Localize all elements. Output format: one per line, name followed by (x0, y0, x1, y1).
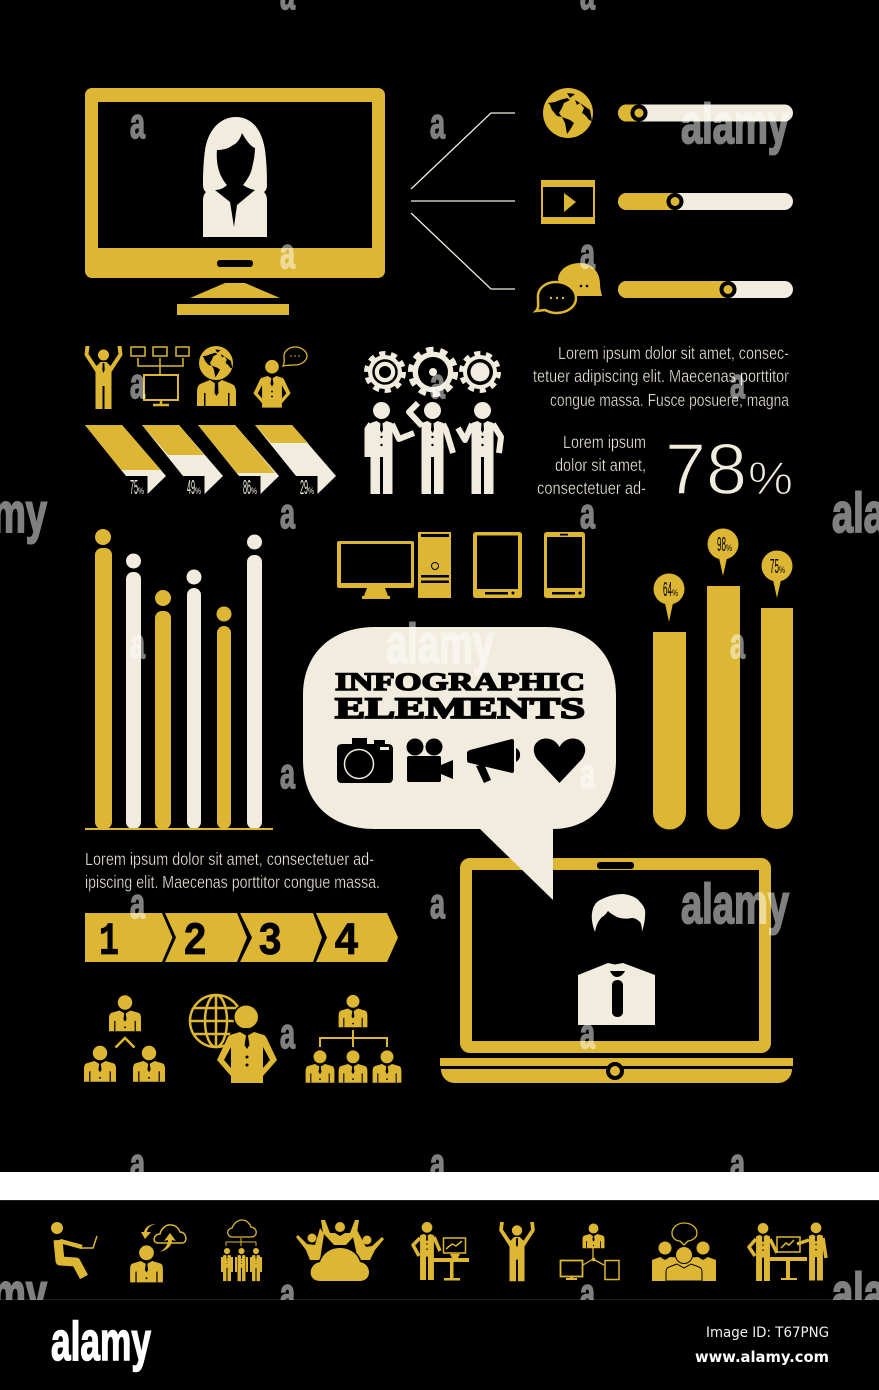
icon: team on cloud (296, 1220, 384, 1281)
bar 4 (186, 570, 202, 829)
icon: presenter at desk (413, 1222, 469, 1280)
stat 78% (665, 430, 793, 510)
step 4 (316, 913, 398, 968)
laptop base (440, 1058, 793, 1083)
icon: tower (418, 532, 451, 598)
chevron 49%: % (195, 486, 201, 496)
chevron 49%: 49 (187, 477, 195, 499)
watermarks: a (430, 360, 446, 408)
woman avatar (203, 117, 267, 237)
watermarks: a (130, 100, 146, 148)
baseline (85, 828, 273, 830)
icon row: business (84, 346, 307, 409)
man pointing (368, 402, 414, 494)
teamwork gears and men (367, 350, 501, 494)
icon: megaphone (467, 739, 520, 783)
text block top right (533, 343, 789, 410)
bar 2 (126, 554, 141, 829)
panel: monitor with woman (85, 88, 385, 315)
icon: two men and chart (749, 1222, 826, 1281)
watermarks: a (730, 360, 746, 408)
device icons (337, 532, 585, 599)
stat 78%: % (748, 452, 793, 504)
watermarks: a (280, 750, 296, 798)
watermarks: a (580, 1010, 596, 1058)
icon: man arms up (499, 1222, 535, 1281)
icon: camera (337, 738, 393, 783)
step 1: 1 (99, 916, 119, 968)
watermarks: a (580, 1270, 596, 1318)
icon: phone (544, 532, 585, 598)
white band (0, 1172, 879, 1200)
bar 1 (95, 529, 112, 829)
globe person icon (190, 995, 277, 1083)
chevron 86%: 86 (243, 477, 251, 499)
watermarks: a (430, 880, 446, 928)
icon: tablet (473, 532, 522, 598)
watermarks: a (130, 620, 146, 668)
tube 98% (707, 528, 740, 830)
band frame (0, 1200, 879, 1300)
text block top right: tetuer adipiscing elit. Maecenas porttitor (533, 366, 789, 386)
watermarks: a (280, 1270, 296, 1318)
watermarks: a (580, 750, 596, 798)
watermarks: a (730, 620, 746, 668)
text block next to 78% (537, 432, 646, 498)
text block top right: Lorem ipsum dolor sit amet, consec- (558, 343, 789, 363)
chevron 29% (255, 425, 336, 499)
footer image id: Image ID: T67PNG (706, 1325, 829, 1341)
watermarks: a (580, 230, 596, 278)
chevron 49% (142, 425, 223, 499)
bar 6 (247, 534, 262, 829)
slider 2 (618, 193, 793, 210)
icon: network of monitors (131, 347, 189, 405)
watermarks: a (730, 1140, 746, 1188)
icon: man with speech bubble (253, 347, 307, 408)
footer url: www.alamy.com (695, 1348, 829, 1366)
watermarks: a (130, 360, 146, 408)
watermarks: a (280, 490, 296, 538)
title (335, 669, 585, 725)
chevron 29%: % (308, 486, 314, 496)
laptop screen (466, 864, 765, 1047)
stat 78%: 78 (665, 430, 747, 510)
icon: cloud team (222, 1220, 261, 1281)
step 3 (240, 913, 322, 968)
man arm raised (409, 402, 453, 494)
step 2: 2 (183, 916, 207, 968)
gear right (462, 354, 498, 390)
tube 98%: % (726, 543, 732, 553)
icon: chat bubbles (536, 263, 602, 313)
tube 75%: 75 (770, 556, 779, 578)
text block left (85, 849, 380, 892)
trackpad ring (608, 1064, 622, 1078)
watermarks: a (430, 1140, 446, 1188)
percent chevrons (85, 425, 336, 499)
chevron 75%: % (138, 486, 144, 496)
icon: heart (534, 739, 585, 783)
camera slot (597, 862, 634, 869)
icon: person and cloud (130, 1224, 186, 1282)
monitor stand (177, 283, 289, 315)
text block left: Lorem ipsum dolor sit amet, consectetuer ad- (85, 849, 374, 869)
watermarks: a (280, 1010, 296, 1058)
watermarks: a (280, 230, 296, 278)
icon: globe man (197, 346, 236, 406)
speech bubble (303, 627, 616, 900)
chevron 86% (198, 425, 279, 499)
icon: globe (543, 88, 593, 138)
slider 1 (618, 104, 793, 122)
step 4: 4 (334, 916, 359, 968)
org chart icon (306, 995, 401, 1083)
connector lines (411, 113, 515, 289)
icon: shared network (560, 1224, 619, 1280)
numbered arrow steps (85, 913, 398, 968)
text block left: ipiscing elit. Maecenas porttitor congue massa. (85, 872, 380, 892)
chevron 75%: 75 (130, 477, 138, 499)
man hand on hip (458, 402, 501, 494)
icon: film camera (406, 738, 453, 782)
watermarks: a (580, 490, 596, 538)
bar 3 (155, 590, 171, 829)
man avatar (578, 894, 655, 1025)
chevron 29%: 29 (300, 477, 308, 499)
watermarks: alamy (681, 92, 789, 155)
tube 98%: 98 (717, 534, 726, 556)
gear middle (411, 350, 455, 394)
monitor body (85, 88, 385, 278)
watermarks: alamy (386, 612, 494, 675)
watermarks: alamy (681, 872, 789, 935)
icon: desktop monitor (337, 541, 414, 599)
tube 64% (653, 574, 686, 830)
tube 64%: 64 (663, 579, 672, 601)
tube 75%: % (779, 565, 785, 575)
chevron 75% (85, 425, 166, 499)
tube 64%: % (672, 588, 678, 598)
team triangle icon (84, 995, 165, 1082)
icon band (0, 1200, 879, 1300)
slider 3 (618, 281, 793, 298)
tube bar chart (653, 528, 793, 830)
icon: man arms up (84, 346, 122, 409)
text block next to 78%: consectetuer ad- (537, 478, 646, 498)
icon: video player (541, 180, 595, 224)
chevron 86%: % (251, 486, 257, 496)
icon: man on laptop (51, 1222, 97, 1277)
monitor screen (98, 102, 372, 248)
title: ELEMENTS (335, 692, 585, 725)
tube 75% (761, 550, 793, 829)
bubble shape (303, 627, 616, 900)
laptop with man (440, 862, 793, 1083)
bar 5 (216, 606, 232, 829)
step 1 (85, 913, 172, 968)
text block next to 78%: Lorem ipsum (563, 432, 646, 452)
gear left (367, 354, 403, 390)
text block top right: congue massa. Fusce posuere, magna (550, 390, 789, 410)
watermarks: a (130, 880, 146, 928)
watermarks: a (130, 1140, 146, 1188)
text block next to 78%: dolor sit amet, (555, 455, 646, 475)
title: INFOGRAPHIC (335, 669, 585, 696)
monitor button (217, 260, 253, 267)
lollipop bar chart (85, 529, 273, 830)
step 3: 3 (258, 916, 282, 968)
footer logo: alamy (51, 1310, 151, 1372)
watermarks: a (430, 100, 446, 148)
step 2 (165, 913, 247, 968)
icon: group with bubble (652, 1223, 716, 1281)
